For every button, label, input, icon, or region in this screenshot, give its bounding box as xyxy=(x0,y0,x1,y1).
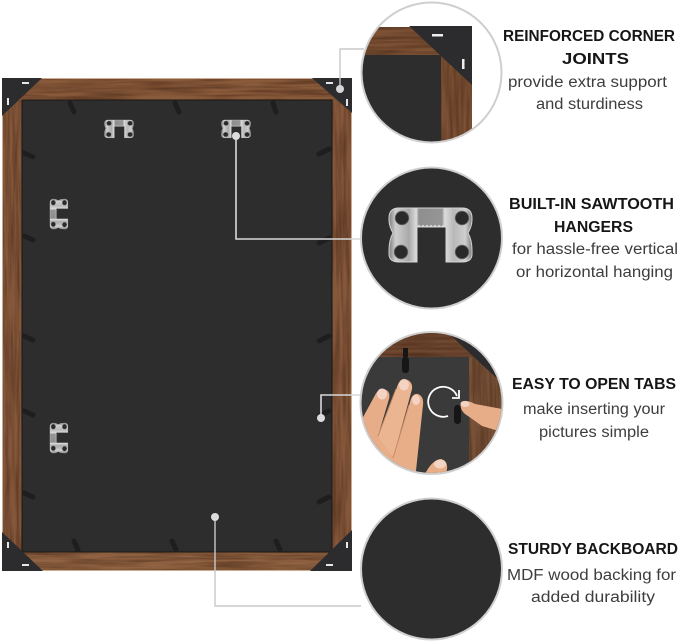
text: built-in sawtooth hangers: for hassle-free vertical xyxy=(512,241,678,258)
circle: sturdy backboard xyxy=(361,498,502,640)
text: built-in sawtooth hangers: BUILT-IN SAWTOOTH xyxy=(509,196,674,213)
text: reinforced corner joints: JOINTS xyxy=(562,51,629,68)
text: easy to open tabs: make inserting your xyxy=(523,401,665,418)
backboard panel xyxy=(22,100,332,552)
text: sturdy backboard: STURDY BACKBOARD xyxy=(508,541,678,558)
text: easy to open tabs: EASY TO OPEN TABS xyxy=(512,376,676,393)
corner brackets xyxy=(2,78,352,571)
icon: fingers xyxy=(363,378,502,473)
circle: reinforced corner xyxy=(350,2,502,150)
text: sturdy backboard: added durability xyxy=(531,589,655,606)
connector: open tabs xyxy=(317,395,361,422)
circle: open tabs with hands xyxy=(360,331,504,475)
connector: corner joints xyxy=(336,49,364,93)
retaining tabs xyxy=(24,103,329,550)
text: reinforced corner joints: provide extra support xyxy=(508,74,668,91)
connector: sawtooth hangers xyxy=(232,132,361,239)
text: reinforced corner joints: REINFORCED CORNER xyxy=(503,28,675,45)
text: easy to open tabs xyxy=(512,376,676,441)
text: sturdy backboard: MDF wood backing for xyxy=(507,567,676,584)
text: reinforced corner joints: and sturdiness xyxy=(536,96,643,113)
text: reinforced corner joints xyxy=(503,28,675,113)
connector: backboard xyxy=(211,513,361,606)
text: sturdy backboard xyxy=(507,541,678,606)
circle: sawtooth hanger xyxy=(361,168,502,308)
text: built-in sawtooth hangers xyxy=(509,196,678,281)
small hangers xyxy=(50,120,251,453)
text: easy to open tabs: pictures simple xyxy=(539,424,649,441)
wood frame xyxy=(2,78,352,571)
icon: rotate arrow xyxy=(428,387,459,417)
panel: frame back xyxy=(2,78,352,571)
icon: large hanger xyxy=(389,208,472,262)
text: built-in sawtooth hangers: HANGERS xyxy=(554,219,633,236)
text: built-in sawtooth hangers: or horizontal hanging xyxy=(516,264,673,281)
